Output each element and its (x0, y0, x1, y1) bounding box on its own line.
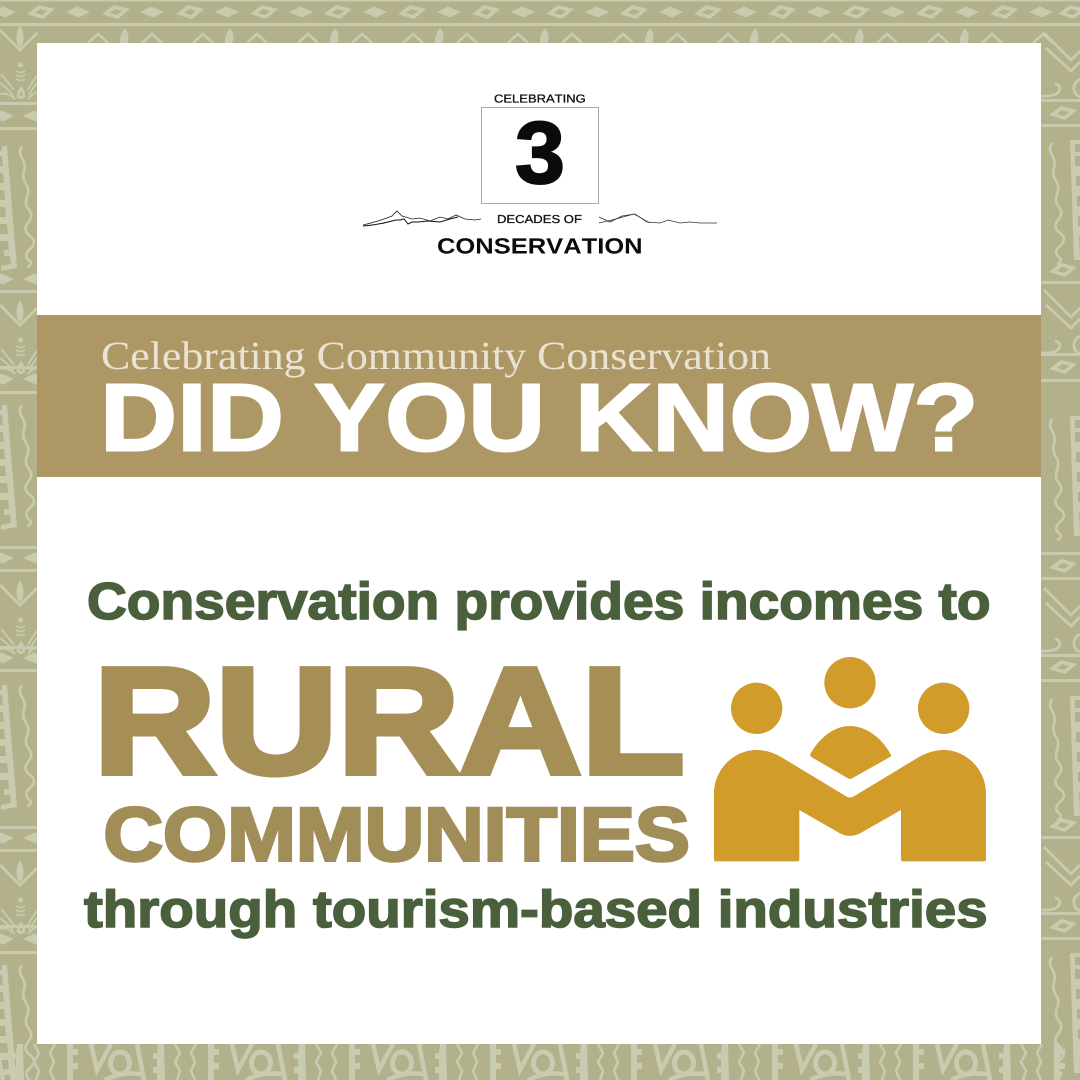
big word: rural: RURAL (94, 636, 684, 805)
closing line: through tourism-based industries: through tourism-based industries (84, 881, 988, 939)
bottom row (0, 1044, 55, 1080)
logo: celebrating 3 decades of conservation: 3 (515, 103, 565, 202)
banner subtitle: Celebrating Community Conservation (101, 333, 771, 378)
big word: communities: COMMUNITIES (104, 792, 690, 878)
right column (1041, 99, 1080, 940)
headline: conservation provides incomes to: Conservation provides incomes to (87, 573, 991, 631)
logo: celebrating 3 decades of conservation: DECADES OF (497, 214, 582, 226)
icon: three people joining hands (714, 657, 986, 861)
banner: did you know (37, 315, 1041, 477)
banner heading: DID YOU KNOW? (100, 364, 978, 472)
logo: celebrating 3 decades of conservation: CELEBRATING (494, 94, 586, 106)
logo: celebrating 3 decades of conservation (363, 94, 717, 258)
logo: celebrating 3 decades of conservation: CONSERVATION (437, 234, 643, 258)
left column (0, 102, 47, 954)
